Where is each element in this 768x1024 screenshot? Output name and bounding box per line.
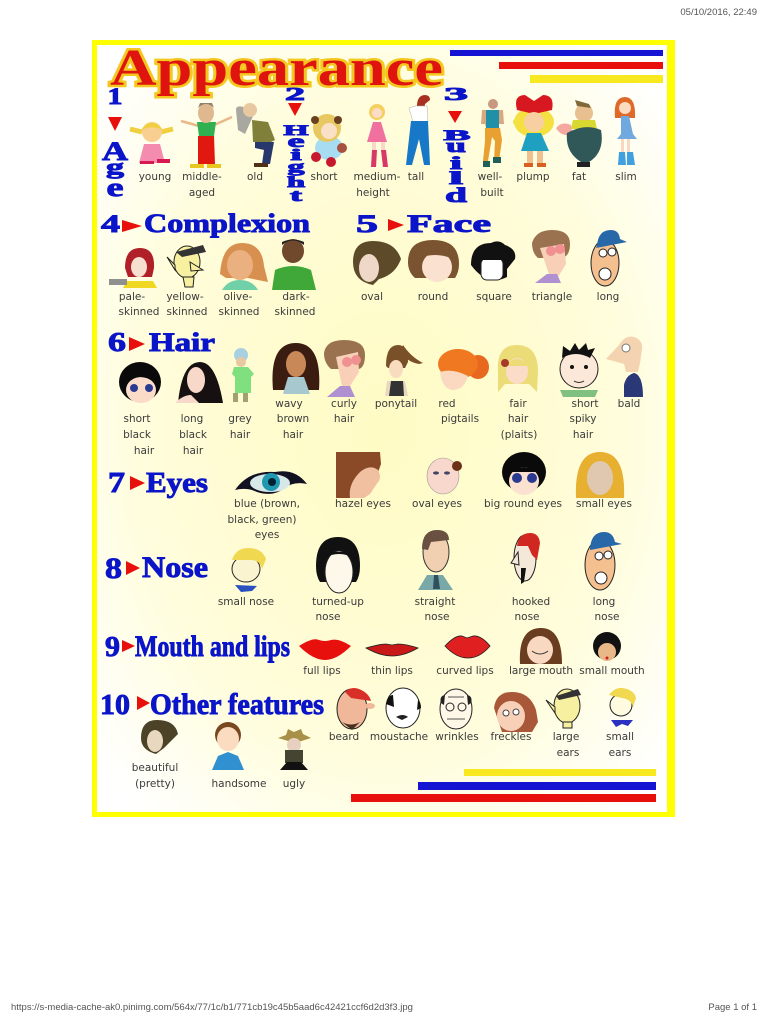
label: slim: slim bbox=[615, 171, 637, 183]
icon: short black hair bbox=[119, 362, 161, 403]
label: young: young bbox=[139, 171, 171, 183]
label: medium-height: height bbox=[356, 187, 390, 199]
section 8 heading: nose: 8 bbox=[105, 552, 122, 585]
icon: blue eye bbox=[235, 471, 307, 494]
section 1: age heading bbox=[102, 84, 128, 202]
label: triangle: triangle bbox=[532, 291, 572, 303]
icon: hooked nose bbox=[511, 533, 540, 584]
icon: long black hair bbox=[175, 362, 223, 403]
section 6 heading: hair: 6 bbox=[108, 327, 126, 357]
labels: beautiful (pretty): (pretty) bbox=[135, 778, 175, 790]
section 6 heading: hair bbox=[108, 327, 215, 357]
title: Appearance bbox=[110, 40, 443, 97]
labels: small ears: small bbox=[606, 731, 634, 743]
icon: fat man bbox=[556, 100, 602, 167]
labels: short black hair bbox=[123, 413, 155, 457]
icon: thin lips bbox=[366, 644, 418, 656]
labels: fair hair (plaits): (plaits) bbox=[501, 429, 537, 441]
icon: short girl bbox=[311, 114, 347, 167]
labels: blue eyes: eyes bbox=[255, 529, 279, 541]
icon: well-built man bbox=[481, 99, 504, 167]
label: small mouth: small mouth bbox=[579, 665, 645, 677]
labels: wavy brown hair: brown bbox=[277, 413, 309, 425]
icon: fair hair plaits bbox=[498, 345, 538, 392]
section 9 heading: mouth and lips bbox=[105, 630, 290, 663]
labels: fair hair (plaits): fair bbox=[509, 398, 527, 410]
labels: turned-up nose: nose bbox=[315, 611, 341, 623]
label: old: old bbox=[247, 171, 263, 183]
labels: beautiful (pretty): beautiful bbox=[132, 762, 178, 774]
label: well-built bbox=[478, 171, 504, 199]
labels: yellow-skinned: skinned bbox=[167, 306, 207, 318]
labels: grey hair: grey bbox=[228, 413, 252, 425]
section 1: age heading: A bbox=[102, 137, 128, 166]
section 2: height heading: i bbox=[290, 147, 303, 164]
label: oval eyes: oval eyes bbox=[412, 498, 462, 510]
icon: triangle face bbox=[532, 230, 570, 283]
section 9 heading: mouth and lips: Mouth and lips bbox=[135, 630, 290, 663]
labels: turned-up nose bbox=[312, 596, 364, 623]
label: plump: plump bbox=[516, 171, 550, 183]
labels: blue eyes: black, green) bbox=[228, 514, 296, 526]
label: fat: fat bbox=[572, 171, 586, 183]
label: large mouth: large mouth bbox=[509, 665, 573, 677]
section 3: build heading bbox=[444, 84, 470, 207]
section 2: height heading: 2 bbox=[285, 84, 305, 104]
icon: old man bbox=[236, 103, 275, 167]
section 5 heading: face: 5 bbox=[356, 211, 378, 238]
label: ponytail: ponytail bbox=[375, 398, 417, 410]
label: medium-height bbox=[354, 171, 401, 199]
labels: dark-skinned bbox=[275, 291, 315, 318]
labels: long nose: long bbox=[593, 596, 615, 608]
icon: oval face bbox=[353, 241, 401, 285]
icon: middle-aged man bbox=[181, 103, 232, 168]
icon: round face bbox=[408, 240, 459, 282]
icon: large ears man bbox=[546, 689, 581, 728]
icon: olive-skinned woman bbox=[220, 243, 268, 290]
section 1: age heading: g bbox=[106, 154, 124, 179]
icon: full lips bbox=[299, 639, 351, 660]
icon: wavy brown hair bbox=[272, 343, 319, 394]
icon: pale-skinned woman bbox=[109, 248, 157, 288]
labels: pale-skinned: skinned bbox=[119, 306, 159, 318]
top decorative bars bbox=[450, 50, 663, 83]
icon: small ears man bbox=[609, 688, 636, 727]
section 8 heading: nose: Nose bbox=[142, 551, 208, 584]
page number footer: Page 1 of 1 bbox=[708, 1002, 757, 1013]
icon: turned-up nose bbox=[316, 537, 360, 593]
labels: large ears: large bbox=[553, 731, 579, 743]
labels: wavy brown hair: wavy bbox=[275, 398, 303, 410]
labels: yellow-skinned bbox=[166, 291, 207, 318]
labels: blue eyes bbox=[228, 498, 300, 541]
label: hazel eyes: hazel eyes bbox=[335, 498, 391, 510]
labels: short black hair: short bbox=[124, 413, 150, 425]
label: full lips: full lips bbox=[303, 665, 341, 677]
section 2: height heading bbox=[284, 84, 309, 205]
label: long: long bbox=[597, 291, 619, 303]
labels: pale-skinned: pale- bbox=[119, 291, 145, 303]
section 4 heading: complexion: Complexion bbox=[144, 209, 311, 238]
section 1: age heading: e bbox=[106, 173, 124, 202]
icon: long face bbox=[591, 230, 627, 286]
icon: grey hair bbox=[232, 348, 254, 402]
labels: small ears bbox=[606, 731, 634, 759]
section 3: build heading: 3 bbox=[444, 84, 468, 104]
labels: long black hair bbox=[179, 413, 208, 457]
icon: freckles woman bbox=[494, 692, 538, 732]
labels: olive-skinned bbox=[219, 291, 259, 318]
labels: hooked nose: nose bbox=[514, 611, 540, 623]
icon: tall woman bbox=[406, 95, 430, 165]
label: medium-height: medium- bbox=[354, 171, 401, 183]
icon: small eyes face bbox=[576, 452, 624, 498]
labels: dark-skinned: dark- bbox=[282, 291, 310, 303]
labels: wavy brown hair bbox=[275, 398, 309, 441]
section 2: height heading: t bbox=[290, 186, 303, 205]
labels: straight nose: straight bbox=[415, 596, 455, 608]
labels: dark-skinned: skinned bbox=[275, 306, 315, 318]
labels: red pigtails: red bbox=[438, 398, 456, 410]
labels: fair hair (plaits): hair bbox=[508, 413, 529, 425]
labels: grey hair: hair bbox=[230, 429, 251, 441]
label: middle-aged: middle- bbox=[182, 171, 222, 183]
bottom decorative bars bbox=[351, 769, 656, 802]
label: handsome: handsome bbox=[212, 778, 266, 790]
section 3: build heading: i bbox=[450, 153, 462, 173]
print timestamp: 05/10/2016, 22:49 bbox=[680, 7, 757, 18]
source URL footer: https://s-media-cache-ak0.pinimg.com/564x/77/1c/b1/771cb19c45b5aad6c42421ccf6d2d3f3.jpg bbox=[11, 1002, 413, 1013]
icon: red pigtails bbox=[438, 349, 489, 390]
label: small eyes: small eyes bbox=[576, 498, 632, 510]
labels: red pigtails bbox=[438, 398, 479, 425]
labels: long black hair: hair bbox=[183, 445, 204, 457]
icon: ugly character bbox=[278, 729, 311, 770]
labels: short spiky hair: spiky bbox=[570, 413, 596, 425]
label: middle-aged bbox=[182, 171, 222, 199]
icon: bald man bbox=[606, 337, 643, 397]
labels: long black hair: long bbox=[181, 413, 203, 425]
section 3: build heading: l bbox=[449, 168, 463, 188]
icon: curved lips bbox=[445, 636, 490, 658]
labels: hooked nose: hooked bbox=[512, 596, 550, 608]
labels: long nose: nose bbox=[594, 611, 620, 623]
section 2: height heading: H bbox=[284, 123, 309, 139]
section 4 heading: complexion bbox=[101, 209, 311, 238]
section 7 heading: eyes: Eyes bbox=[146, 468, 208, 499]
labels: curly hair bbox=[331, 398, 357, 425]
section 5 heading: face bbox=[356, 211, 491, 238]
icon: large mouth face bbox=[520, 628, 562, 664]
label: oval: oval bbox=[361, 291, 383, 303]
section 10 heading: other features: 10 bbox=[100, 689, 130, 721]
icon: curly hair bbox=[324, 340, 365, 397]
labels: curly hair: hair bbox=[334, 413, 355, 425]
section 2: height heading: g bbox=[288, 157, 306, 176]
labels: long black hair: black bbox=[179, 429, 208, 441]
icon: oval eyes face bbox=[427, 458, 462, 494]
icon: short spiky hair bbox=[560, 343, 598, 397]
icon: yellow-skinned man bbox=[167, 245, 206, 287]
section 3: build heading: u bbox=[446, 136, 467, 157]
labels: turned-up nose: turned-up bbox=[312, 596, 364, 608]
icon: straight nose bbox=[418, 530, 453, 590]
label: well-built: well- bbox=[478, 171, 503, 183]
label: moustache: moustache bbox=[370, 731, 428, 743]
label: thin lips: thin lips bbox=[371, 665, 413, 677]
label: wrinkles: wrinkles bbox=[435, 731, 479, 743]
section 3: build heading: d bbox=[445, 183, 468, 207]
labels: short spiky hair: short bbox=[572, 398, 598, 410]
section 2: height heading: e bbox=[288, 131, 304, 151]
icon: ponytail bbox=[385, 345, 423, 396]
label: curved lips: curved lips bbox=[436, 665, 494, 677]
section 3: build heading: B bbox=[444, 128, 470, 144]
section 7 heading: eyes bbox=[108, 467, 208, 499]
section 9 heading: mouth and lips: 9 bbox=[105, 631, 120, 663]
icon: square face bbox=[471, 241, 515, 280]
labels: small nose: small nose bbox=[218, 596, 274, 608]
section 10 heading: other features: Other features bbox=[150, 688, 324, 721]
labels: beautiful (pretty) bbox=[132, 762, 178, 790]
labels: straight nose: nose bbox=[424, 611, 450, 623]
labels: fair hair (plaits) bbox=[501, 398, 537, 441]
icon: dark-skinned man bbox=[272, 239, 316, 290]
section 1: age heading: 1 bbox=[108, 84, 122, 109]
labels: yellow-skinned: yellow- bbox=[166, 291, 204, 303]
icon: long nose bbox=[585, 532, 622, 590]
labels: hooked nose bbox=[512, 596, 550, 623]
label: middle-aged: aged bbox=[189, 187, 215, 199]
label: ugly: ugly bbox=[283, 778, 305, 790]
icon: plump girl bbox=[513, 95, 554, 167]
section 7 heading: eyes: 7 bbox=[108, 467, 125, 499]
section 4 heading: complexion: 4 bbox=[101, 211, 121, 238]
icon: beard man bbox=[337, 688, 375, 730]
labels: olive-skinned: olive- bbox=[224, 291, 253, 303]
labels: olive-skinned: skinned bbox=[219, 306, 259, 318]
labels: wavy brown hair: hair bbox=[283, 429, 304, 441]
labels: short spiky hair bbox=[570, 398, 598, 441]
icon: hazel eyes face bbox=[336, 452, 381, 498]
label: freckles: freckles bbox=[491, 731, 531, 743]
labels: curly hair: curly bbox=[331, 398, 357, 410]
icon: slim girl bbox=[615, 97, 637, 165]
icon: wrinkles man bbox=[440, 689, 472, 729]
label: beard: beard bbox=[329, 731, 359, 743]
labels: blue eyes: blue (brown, bbox=[234, 498, 300, 510]
section 8 heading: nose bbox=[105, 551, 208, 585]
labels: short black hair: black bbox=[123, 429, 152, 441]
icon: handsome boy bbox=[212, 722, 244, 770]
labels: pale-skinned bbox=[119, 291, 159, 318]
labels: large ears: ears bbox=[557, 747, 579, 759]
icon: medium-height girl bbox=[367, 104, 388, 167]
labels: grey hair bbox=[228, 413, 252, 441]
section 6 heading: hair: Hair bbox=[149, 328, 215, 357]
labels: small ears: ears bbox=[609, 747, 631, 759]
labels: short spiky hair: hair bbox=[573, 429, 594, 441]
label: square: square bbox=[476, 291, 512, 303]
labels: long nose bbox=[593, 596, 620, 623]
section 5 heading: face: Face bbox=[407, 211, 491, 238]
icon: beautiful woman bbox=[141, 720, 178, 754]
label: bald: bald bbox=[618, 398, 640, 410]
label: short: short bbox=[311, 171, 337, 183]
label: round: round bbox=[418, 291, 448, 303]
label: tall: tall bbox=[408, 171, 424, 183]
icon: small nose bbox=[232, 548, 266, 592]
labels: large ears bbox=[553, 731, 579, 759]
icon: big round eyes face bbox=[502, 452, 546, 495]
icon: moustache man bbox=[386, 688, 421, 728]
label: well-built: built bbox=[480, 187, 504, 199]
labels: short black hair: hair bbox=[134, 445, 155, 457]
icon: small mouth face bbox=[593, 632, 621, 661]
labels: red pigtails: pigtails bbox=[441, 413, 479, 425]
label: big round eyes: big round eyes bbox=[484, 498, 562, 510]
labels: straight nose bbox=[415, 596, 455, 623]
section 2: height heading: h bbox=[287, 175, 306, 191]
icon: young girl bbox=[130, 122, 173, 164]
poster frame bbox=[92, 40, 675, 817]
